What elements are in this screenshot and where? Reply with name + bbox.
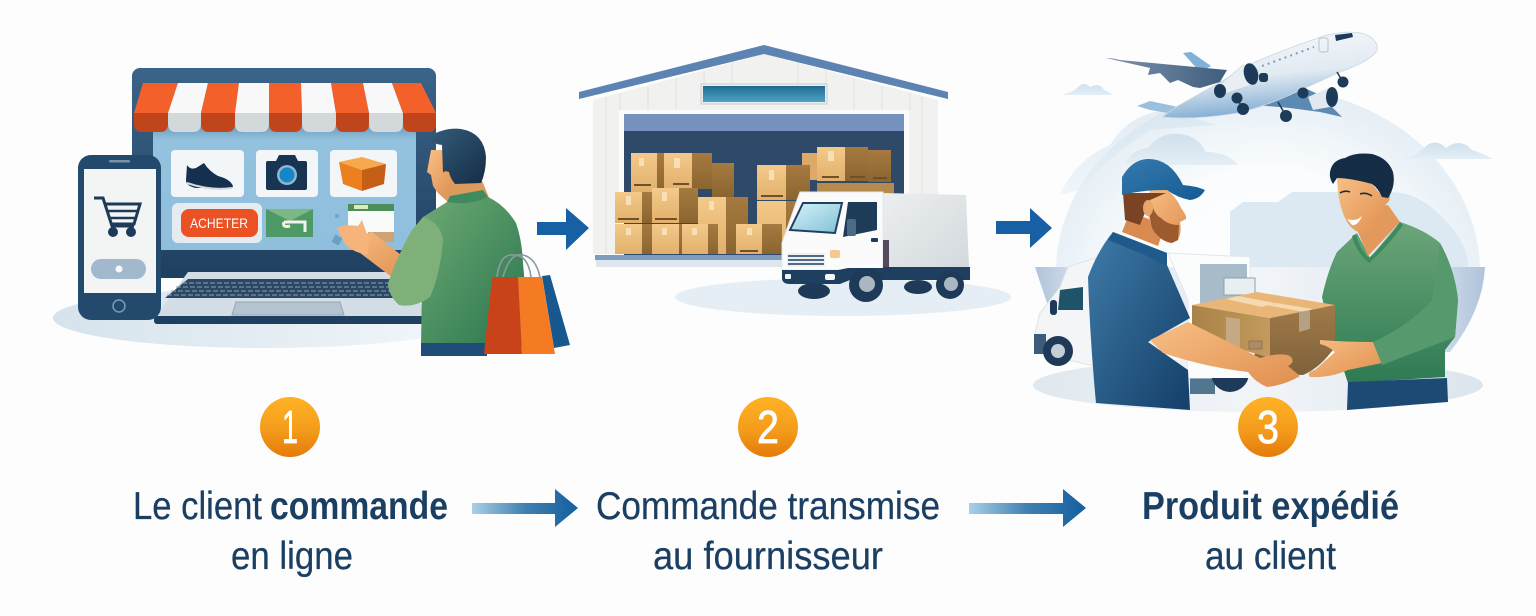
buy button: ACHETER	[190, 215, 248, 231]
payment card	[332, 204, 394, 245]
product card: box	[330, 150, 397, 197]
customer	[1322, 154, 1458, 410]
step badge 3: 3	[1257, 401, 1279, 453]
step 1 label	[133, 485, 448, 578]
delivery van	[1034, 253, 1255, 394]
ground shadow	[675, 278, 1011, 316]
distant hills	[1230, 192, 1468, 268]
step 1 label: Le client	[133, 485, 262, 528]
shopping bags	[484, 255, 570, 354]
delivery truck	[782, 192, 970, 302]
ground	[1033, 358, 1483, 412]
illustration: parcel handover with plane	[1033, 32, 1492, 412]
smartphone	[78, 155, 161, 320]
step 1 label: en ligne	[231, 535, 353, 578]
arrow: illustration 2 to illustration 3	[996, 208, 1052, 248]
arrow: step 1 to step 2	[472, 489, 578, 527]
sky circle	[1056, 92, 1480, 267]
icon: shopping cart	[94, 198, 140, 236]
laptop	[132, 68, 436, 324]
step 3 label: Produit expédié	[1142, 485, 1399, 528]
step 2 label: au fournisseur	[653, 535, 883, 578]
clouds	[1060, 84, 1493, 195]
product card: shoe	[171, 150, 244, 197]
step badge 2	[738, 397, 798, 457]
illustration: warehouse and delivery truck	[579, 45, 1011, 316]
shop awning	[134, 83, 436, 132]
arrow: step 1 to illustration 2	[537, 208, 589, 250]
parcel	[1192, 292, 1335, 375]
green envelope	[266, 209, 313, 237]
ground shadow	[53, 288, 477, 348]
illustration: customer ordering online	[53, 68, 570, 356]
step 3 label	[1142, 485, 1399, 578]
delivery man	[1088, 159, 1300, 410]
airplane	[1106, 32, 1377, 122]
step badge 1	[260, 397, 320, 457]
step badge 2: 2	[757, 401, 779, 453]
step 2 label	[596, 485, 940, 578]
step 2 label: Commande transmise	[596, 485, 940, 528]
buy button	[172, 203, 262, 243]
warehouse building	[579, 45, 948, 267]
arrow: step 2 to step 3	[969, 489, 1086, 527]
step 1 label: commande	[270, 485, 448, 528]
horizon band	[1035, 267, 1485, 352]
product card: camera	[256, 150, 318, 197]
step badge 1: 1	[282, 401, 298, 453]
step 3 label: au client	[1205, 535, 1336, 578]
man with shopping bags	[337, 129, 570, 356]
stacked cardboard boxes	[615, 147, 894, 254]
step badge 3	[1238, 397, 1298, 457]
customer hands and sleeve	[1309, 243, 1458, 377]
